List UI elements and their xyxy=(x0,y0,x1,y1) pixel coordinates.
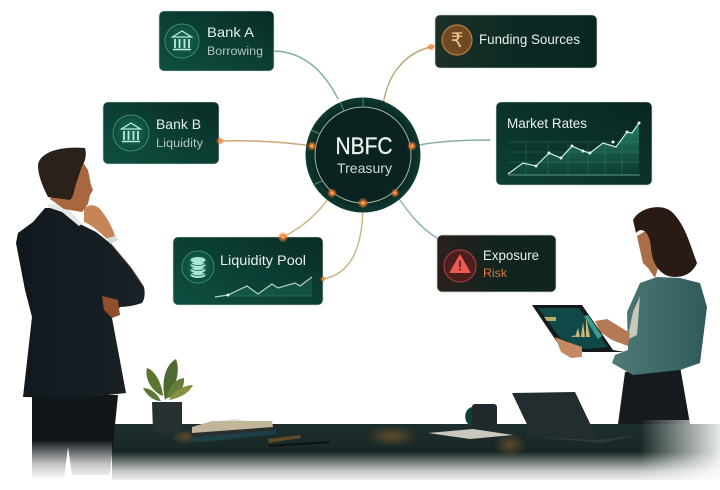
pen and notepad xyxy=(268,435,330,447)
books xyxy=(189,419,277,442)
icon: warning xyxy=(444,250,476,282)
icon: leaves xyxy=(143,359,193,401)
woman blouse xyxy=(612,277,707,375)
sparkline xyxy=(215,277,312,297)
person: woman with tablet xyxy=(532,207,707,424)
panel: Bank A borrowing xyxy=(159,11,274,71)
label: Market Rates: Market Rates xyxy=(507,116,587,131)
icon: rupee: ₹ xyxy=(451,30,463,52)
label: Exposure: Exposure xyxy=(483,248,539,263)
label: Treasury: Treasury xyxy=(337,160,392,176)
man collar xyxy=(47,204,82,226)
label: Borrowing: Borrowing xyxy=(207,46,263,58)
label: Risk: Risk xyxy=(483,266,508,280)
panel: Liquidity Pool xyxy=(173,237,323,305)
laptop xyxy=(512,392,640,443)
coffee mug xyxy=(465,404,497,431)
label: Liquidity: Liquidity xyxy=(156,138,203,150)
hub: NBFC Treasury xyxy=(306,97,420,212)
plant pot xyxy=(152,402,182,434)
panel: Market Rates xyxy=(496,102,652,185)
woman head xyxy=(633,207,697,278)
icon: bank B xyxy=(113,115,149,151)
panel: Funding Sources xyxy=(435,15,597,68)
woman skirt xyxy=(618,366,690,424)
panel: Bank B liquidity xyxy=(103,102,219,164)
label: Bank A: Bank A xyxy=(207,24,255,40)
paper sheet xyxy=(428,429,513,439)
label: Funding Sources: Funding Sources xyxy=(479,32,580,47)
icon: rupee xyxy=(442,25,472,55)
woman front hand xyxy=(555,337,582,358)
man hand on chin xyxy=(84,205,115,239)
label: Bank B: Bank B xyxy=(156,116,201,132)
label: Liquidity Pool: Liquidity Pool xyxy=(220,253,306,268)
woman arm and hand xyxy=(595,319,630,346)
icon: bank A xyxy=(165,24,199,58)
plant xyxy=(143,359,193,434)
line chart: market rates xyxy=(508,122,640,175)
icon: coin stack xyxy=(182,251,214,283)
label: NBFC: NBFC xyxy=(336,133,392,160)
glowing connector nodes xyxy=(216,43,435,282)
woman shirt front xyxy=(627,296,640,340)
panel: Exposure Risk xyxy=(437,235,556,292)
man head xyxy=(38,148,93,212)
man trousers xyxy=(32,395,118,480)
table xyxy=(112,424,720,484)
man arm hand xyxy=(102,296,120,318)
tablet xyxy=(532,305,625,352)
connector lines xyxy=(220,46,490,279)
man jacket xyxy=(16,208,145,398)
fade of table and legs into background xyxy=(0,420,720,490)
person: man in suit xyxy=(16,148,145,480)
man jacket arm highlight xyxy=(110,243,143,286)
